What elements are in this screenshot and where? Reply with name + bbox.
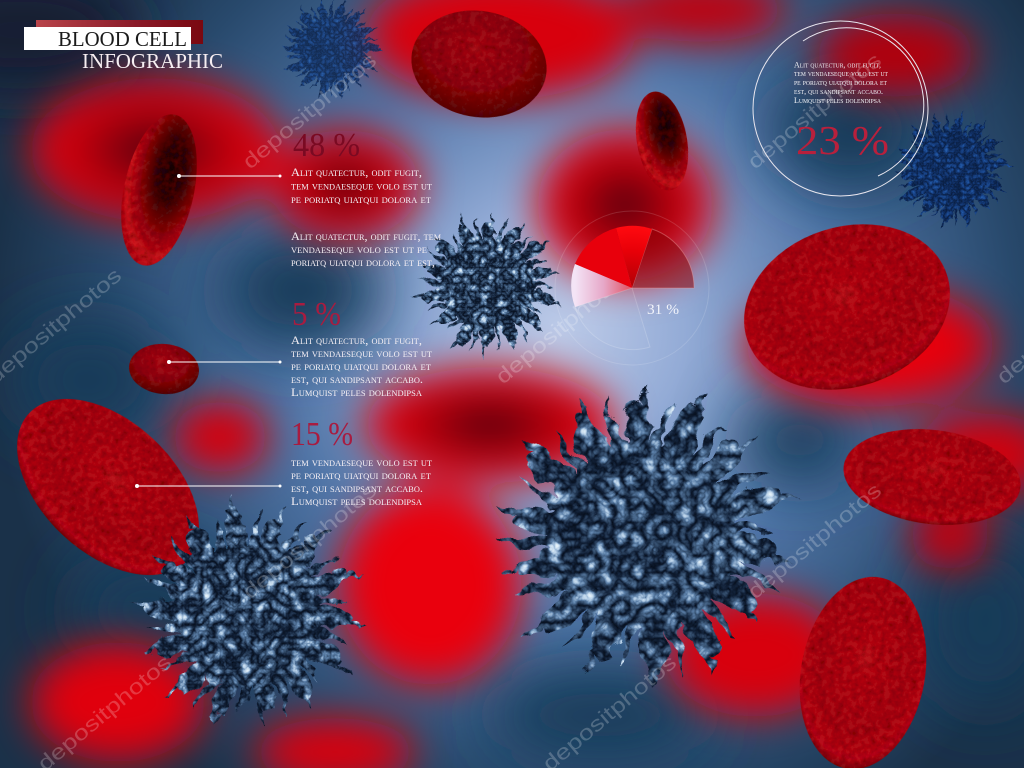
sector: red right	[632, 229, 694, 288]
cell: top centre	[403, 0, 555, 128]
sector: red top	[616, 226, 652, 288]
text block: untitled paragraph	[291, 229, 441, 269]
paragraph: Lumquist peles dolendipsa	[291, 494, 422, 508]
pie chart: 31 %	[555, 211, 709, 365]
paragraph: pe poriatq uiatqui dolora et	[291, 468, 431, 482]
text block: 15 %	[291, 416, 432, 508]
paragraph	[794, 60, 888, 105]
callout line: 5 %	[167, 360, 282, 364]
callout lines	[135, 174, 282, 488]
virus: large centre	[474, 362, 814, 702]
stock watermarks: depositphotos	[238, 479, 381, 604]
paragraph: tem vendaeseque volo est ut	[291, 346, 432, 360]
inner arc	[803, 28, 924, 176]
text block: untitled paragraph: vendaeseque volo est ut pe	[291, 242, 427, 256]
title backing bar: white	[24, 27, 191, 50]
virus: upper right, blue	[886, 104, 1016, 234]
paragraph: tem vendaeseque volo est ut	[291, 455, 432, 469]
pie label: 31 %	[647, 302, 679, 318]
stock watermarks: depositphotos	[743, 479, 886, 604]
virus: centre	[388, 185, 586, 383]
stock watermarks: depositphotos	[238, 49, 381, 174]
virus: lower left	[81, 447, 412, 768]
faint outer ring	[555, 211, 709, 365]
paragraph: tem vendaeseque volo est ut	[291, 178, 432, 192]
title backing bar: red	[36, 20, 203, 44]
paragraph: Alit quatectur, odit fugit,	[291, 165, 422, 179]
paragraph: pe poriatq uiatqui dolora et	[794, 77, 887, 87]
title line 1: BLOOD CELL	[58, 27, 187, 51]
text block: 48 %	[291, 127, 432, 206]
text block: untitled paragraph: poriatq uiatqui dolora et est,	[291, 255, 435, 269]
text block: 5 %	[291, 296, 432, 399]
title block	[24, 20, 223, 73]
percentage: 5 %: 5 %	[292, 296, 341, 333]
virus: top, out of focus	[271, 0, 391, 108]
cell: lower right	[838, 420, 1024, 534]
cell: small left	[127, 341, 201, 397]
paragraph: est, qui sandipsant accabo.	[291, 372, 423, 386]
title line 2: INFOGRAPHIC	[82, 49, 223, 73]
paragraph	[291, 455, 432, 508]
percentage: 15 %: 15 %	[291, 416, 353, 453]
percentage: 23 %: 23 %	[796, 117, 889, 163]
paragraph: tem vendaeseque volo est ut	[794, 68, 888, 78]
sector: red left	[575, 228, 632, 288]
cell: lower left	[0, 365, 232, 609]
cell: bottom right	[785, 567, 941, 768]
circle callout: 23 %	[753, 21, 928, 196]
paragraph: est, qui sandipsant accabo.	[794, 86, 883, 96]
callout line: 15 %	[135, 484, 282, 488]
paragraph: Lumquist peles dolendipsa	[291, 385, 422, 399]
sector: pale	[571, 264, 632, 307]
cell: upper left	[109, 107, 209, 273]
cell: large right	[722, 198, 972, 416]
sector: outline only	[575, 288, 650, 350]
paragraph: Alit quatectur, odit fugit,	[291, 333, 422, 347]
paragraph: Alit quatectur, odit fugit,	[794, 60, 881, 70]
text block: untitled paragraph: Alit quatectur, odit fugit, tem	[291, 229, 441, 243]
stock watermarks: depositphotos	[743, 49, 886, 174]
cell: small upper right	[629, 87, 695, 195]
paragraph: pe poriatq uiatqui dolora et	[291, 359, 431, 373]
paragraph: est, qui sandipsant accabo.	[291, 481, 423, 495]
percentage: 48 %: 48 %	[293, 127, 360, 164]
paragraph	[291, 165, 432, 206]
outer ring	[753, 21, 928, 196]
callout line: 48 %	[177, 174, 282, 178]
paragraph	[291, 333, 432, 399]
stock watermarks: depositphotos	[491, 264, 634, 389]
paragraph: pe poriatq uiatqui dolora et	[291, 192, 431, 206]
paragraph: Lumquist peles dolendipsa	[794, 95, 882, 105]
